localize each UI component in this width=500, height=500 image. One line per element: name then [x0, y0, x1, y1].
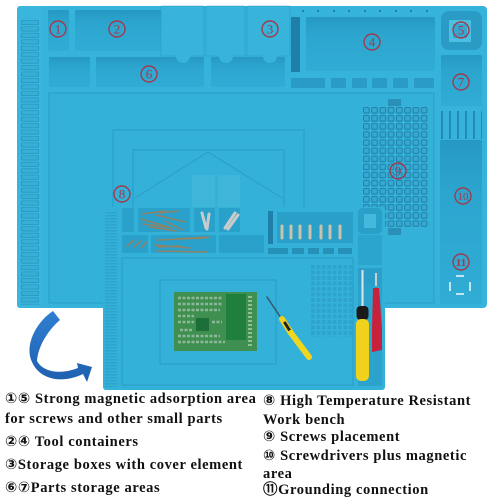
number markers large mat: 2 [114, 22, 120, 36]
storage area 7 [441, 55, 482, 106]
legend right column: area [263, 466, 293, 482]
number markers large mat: 5 [458, 22, 464, 38]
small slots row [291, 78, 434, 88]
number markers large mat: 6 [146, 66, 153, 82]
legend left column: for screws and other small parts [5, 411, 223, 427]
tool tray 4 [291, 10, 435, 72]
legend right column: Work bench [263, 412, 345, 428]
legend left column: ③Storage boxes with cover element [5, 457, 243, 473]
screwdriver bits [282, 226, 340, 238]
grounding connection marks [449, 275, 471, 295]
legend right column [263, 393, 471, 498]
legend right column: ⑧ High Temperature Resistant [263, 393, 471, 409]
small mat photo [103, 207, 385, 390]
number markers large mat [50, 21, 471, 270]
legend right column: ⑪Grounding connection [263, 480, 429, 498]
small ruler strip [105, 212, 117, 387]
curved arrow [29, 311, 92, 382]
circuit board [174, 292, 257, 351]
yellow screwdriver [356, 270, 369, 381]
number markers large mat: 7 [458, 74, 465, 90]
small right column [358, 208, 382, 386]
compartment 2 [75, 10, 162, 51]
small yellow screwdriver [267, 297, 309, 357]
red screwdriver [372, 273, 382, 352]
ruler strip [17, 6, 42, 308]
number markers large mat: 10 [458, 191, 469, 203]
legend left column: ②④ Tool containers [5, 434, 139, 450]
stripes [441, 111, 482, 139]
number markers large mat: 1 [55, 22, 61, 36]
number markers large mat: 8 [119, 186, 125, 202]
legend left column: ①⑤ Strong magnetic adsorption area [5, 391, 257, 407]
screw compartments [122, 208, 264, 253]
number markers large mat: 11 [456, 257, 466, 269]
legend right column: ⑩ Screwdrivers plus magnetic [263, 448, 467, 464]
magnetic well 5 [441, 11, 482, 50]
number markers large mat: 4 [369, 34, 376, 50]
number markers large mat: 9 [395, 164, 401, 178]
small screw grid [311, 265, 354, 337]
screwdriver trough 10 [440, 140, 482, 304]
compartment 1 [48, 10, 69, 51]
small work area [122, 258, 353, 385]
number markers large mat: 3 [267, 22, 273, 36]
storage box covers [161, 6, 290, 56]
screws [127, 211, 238, 252]
screw placement grid [363, 99, 429, 235]
small tool tray [268, 211, 353, 254]
parts storage row [49, 49, 285, 87]
legend right column: ⑨ Screws placement [263, 429, 400, 445]
legend left column: ⑥⑦Parts storage areas [5, 480, 160, 496]
large silicone mat [17, 6, 487, 308]
main work area [49, 93, 434, 303]
legend left column [5, 391, 257, 496]
